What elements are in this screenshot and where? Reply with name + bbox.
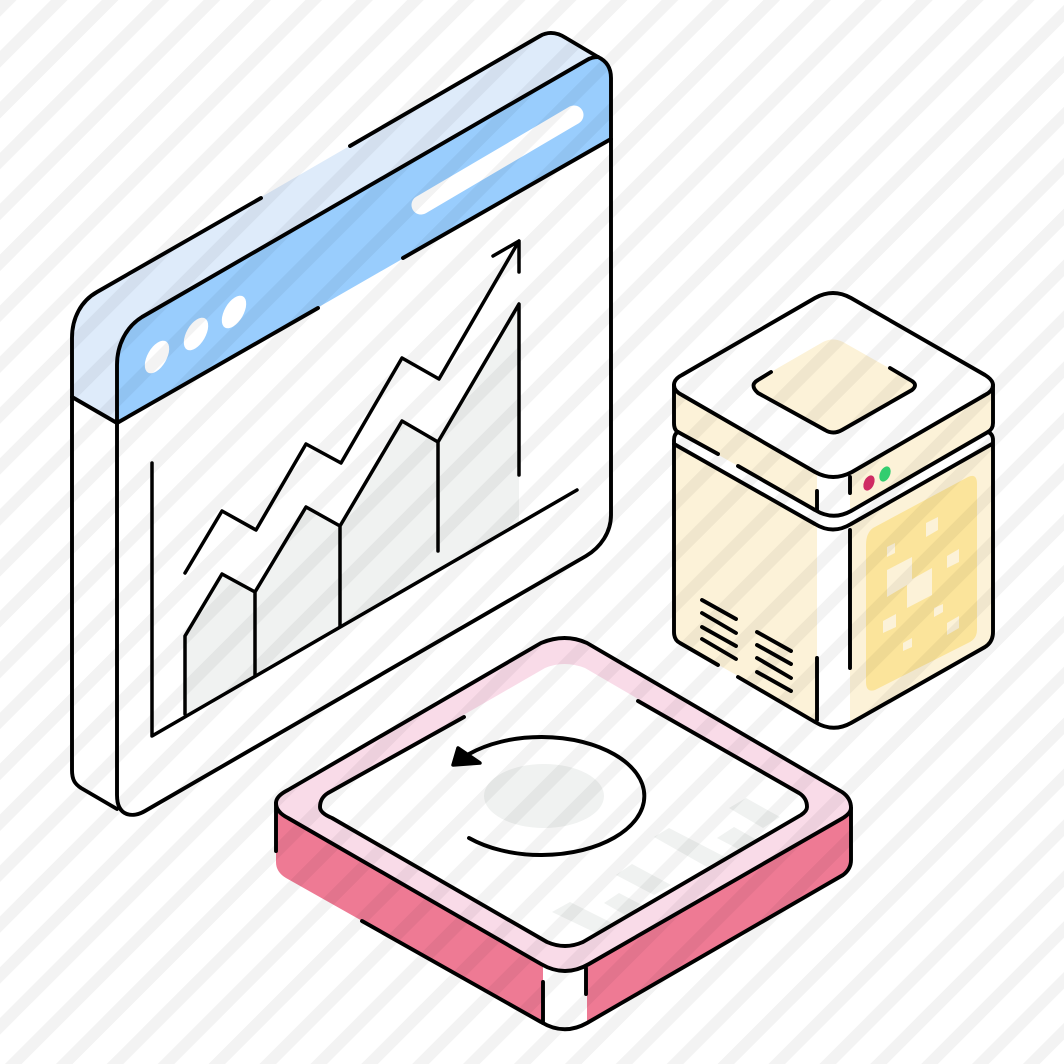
address bar [421,115,574,205]
rising trend arrow [185,241,519,573]
chart area fill [185,304,519,715]
platform outline [276,638,851,1029]
centre disc [484,764,604,828]
platform surface shadow tiles [552,798,780,933]
panel: browser window [72,33,611,815]
area chart [152,241,577,736]
server outline [674,293,993,728]
window control dots [140,292,251,377]
panel: server box [674,293,993,728]
panel data tiles [883,517,959,651]
window outline [72,33,611,815]
platform side faces, pink [276,805,851,1023]
chart axes [152,463,577,736]
panel: rotating platform [276,638,851,1029]
vents [702,600,791,691]
status lights [861,474,877,492]
platform rim, light pink [276,638,851,971]
server cream faces [674,386,993,725]
chart area outlines [185,304,519,714]
window title bar, blue [117,57,611,423]
server lid square [754,340,915,432]
window top edge, light blue [72,33,598,423]
server display panel [866,476,977,691]
rotation arrow [453,737,644,855]
